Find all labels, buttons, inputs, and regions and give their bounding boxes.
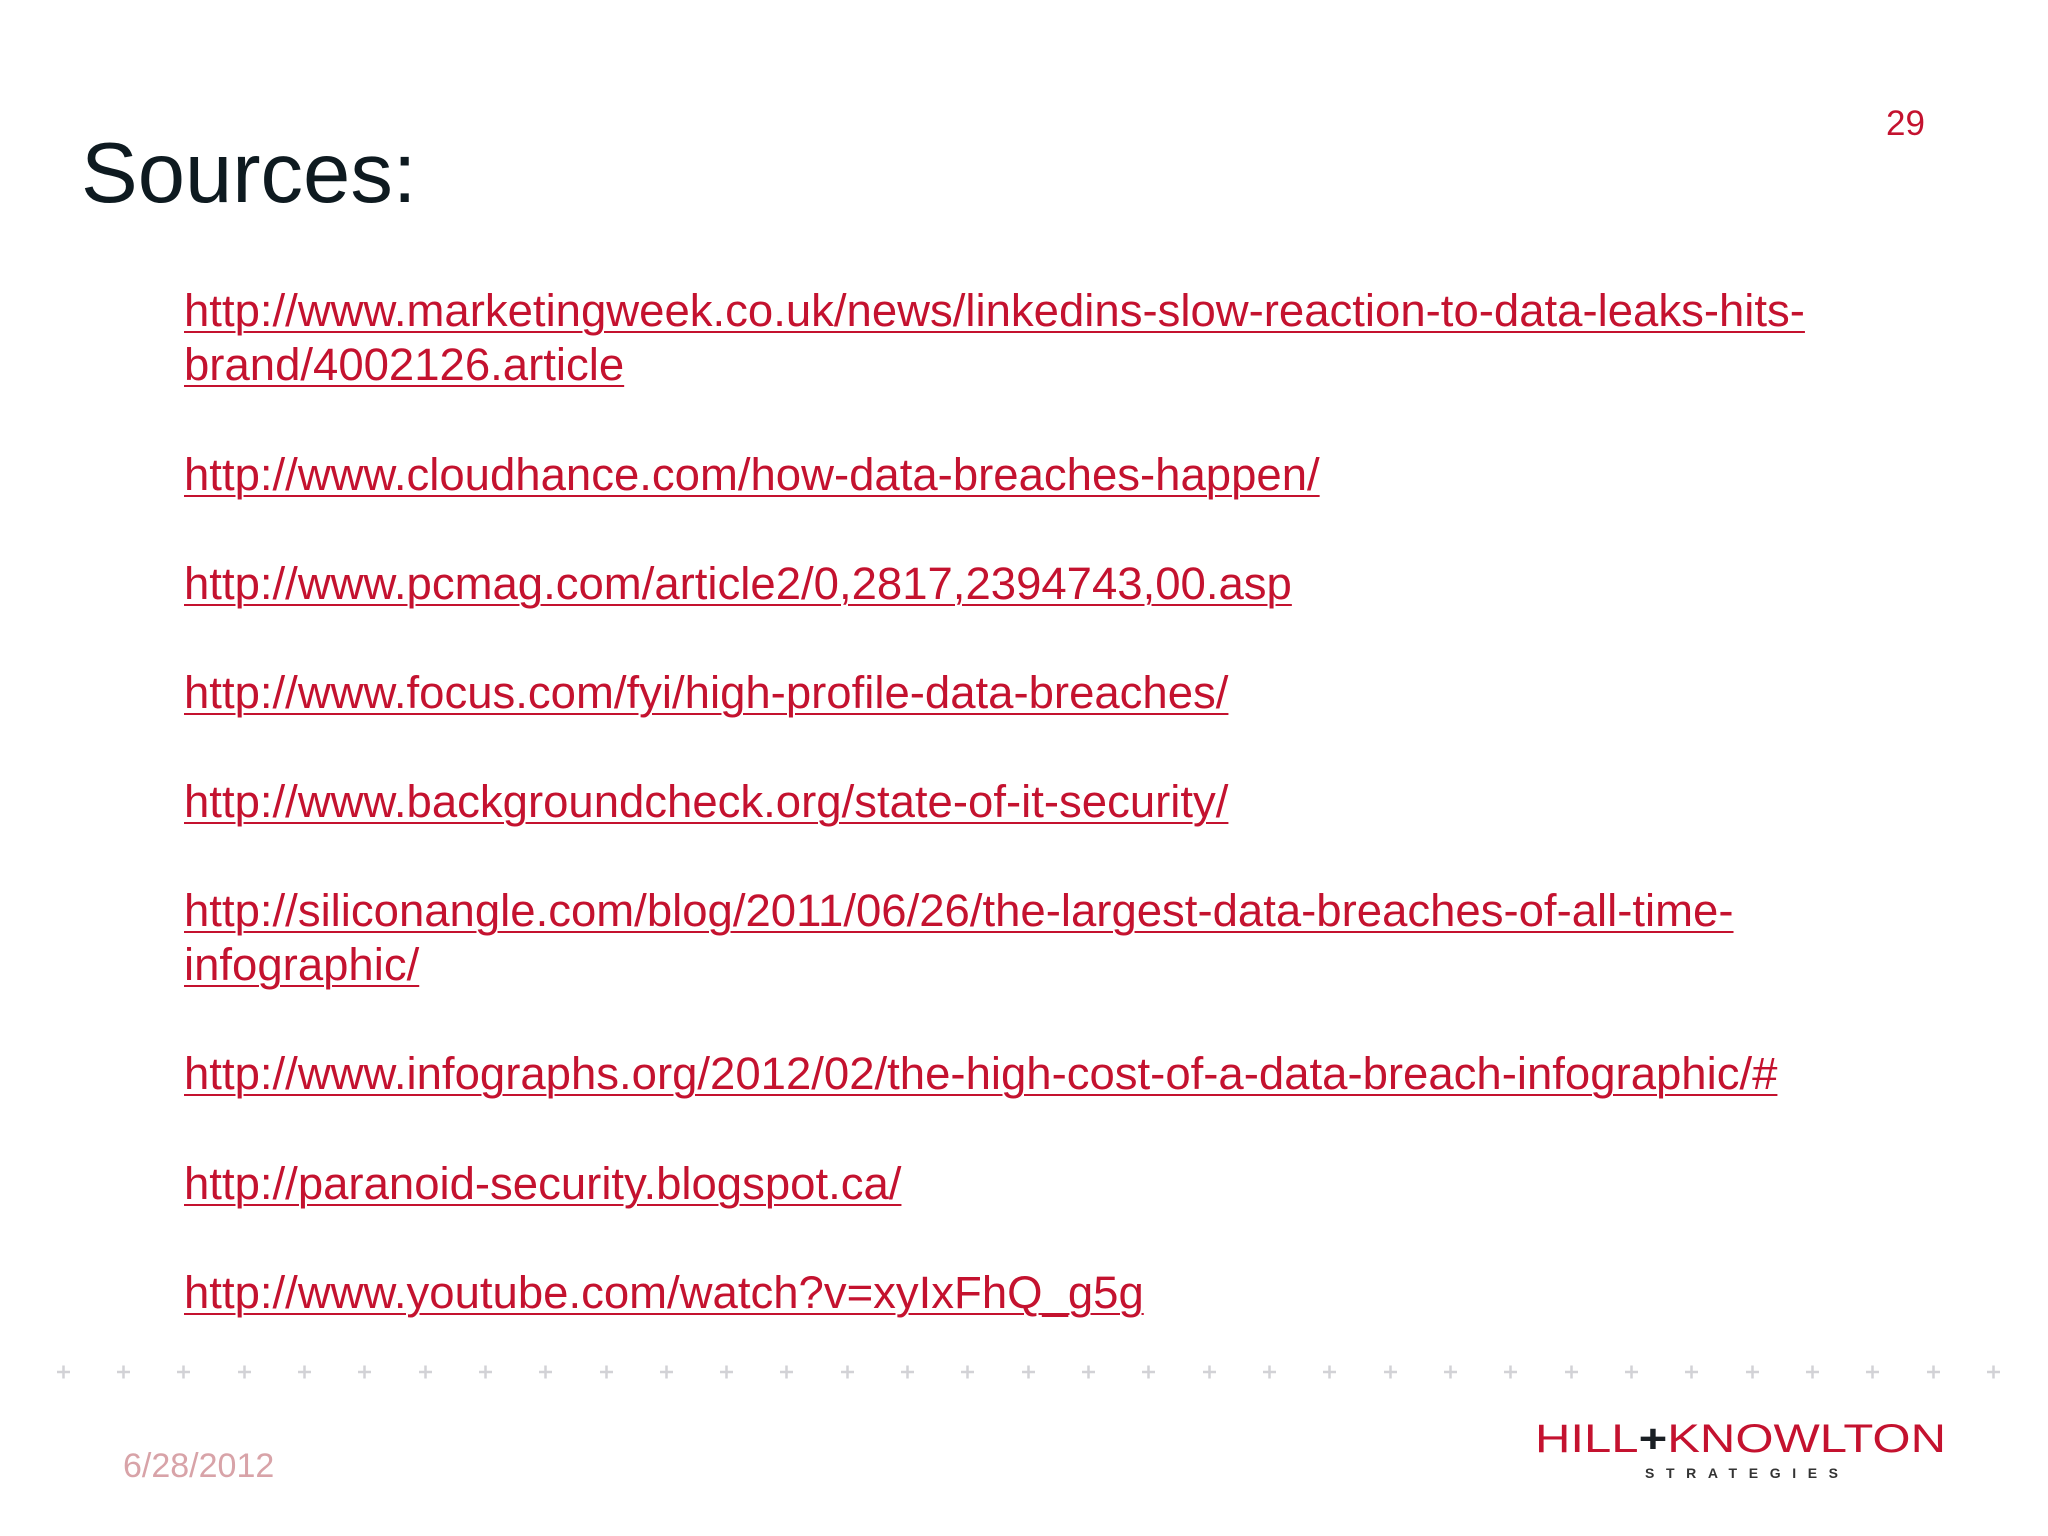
date: 6/28/2012 — [123, 1447, 274, 1485]
link 9: http://www.youtube.com/watch?v=xyIxFhQ_g5g — [184, 1267, 1144, 1318]
link 6: http://siliconangle.com/blog/2011/06/26/the-largest-data-breaches-of-all-time- — [184, 885, 1734, 936]
link 4: http://www.focus.com/fyi/high-profile-data-breaches/ — [184, 667, 1228, 718]
link 6: infographic/ — [184, 939, 419, 990]
logo: Hill+Knowlton Strategies: HILL +KNOWLTON — [1535, 1417, 1946, 1461]
link 6 — [184, 885, 1734, 990]
logo: Hill+Knowlton Strategies: STRATEGIES — [1645, 1465, 1838, 1481]
link 1 — [184, 285, 1805, 390]
link 8: http://paranoid-security.blogspot.ca/ — [184, 1158, 901, 1209]
page number: 29 — [1886, 104, 1925, 143]
plus-sign divider row — [57, 1366, 2000, 1378]
link 3: http://www.pcmag.com/article2/0,2817,2394743,00.asp — [184, 558, 1292, 609]
link 2: http://www.cloudhance.com/how-data-breaches-happen/ — [184, 449, 1320, 500]
title: Sources: — [81, 126, 416, 221]
link 5: http://www.backgroundcheck.org/state-of-it-security/ — [184, 776, 1228, 827]
link 1: http://www.marketingweek.co.uk/news/linkedins-slow-reaction-to-data-leaks-hits- — [184, 285, 1805, 336]
link 7: http://www.infographs.org/2012/02/the-high-cost-of-a-data-breach-infographic/# — [184, 1048, 1777, 1099]
source list — [184, 285, 1805, 1318]
link 1: brand/4002126.article — [184, 339, 624, 390]
logo: Hill+Knowlton Strategies — [1535, 1417, 1946, 1481]
